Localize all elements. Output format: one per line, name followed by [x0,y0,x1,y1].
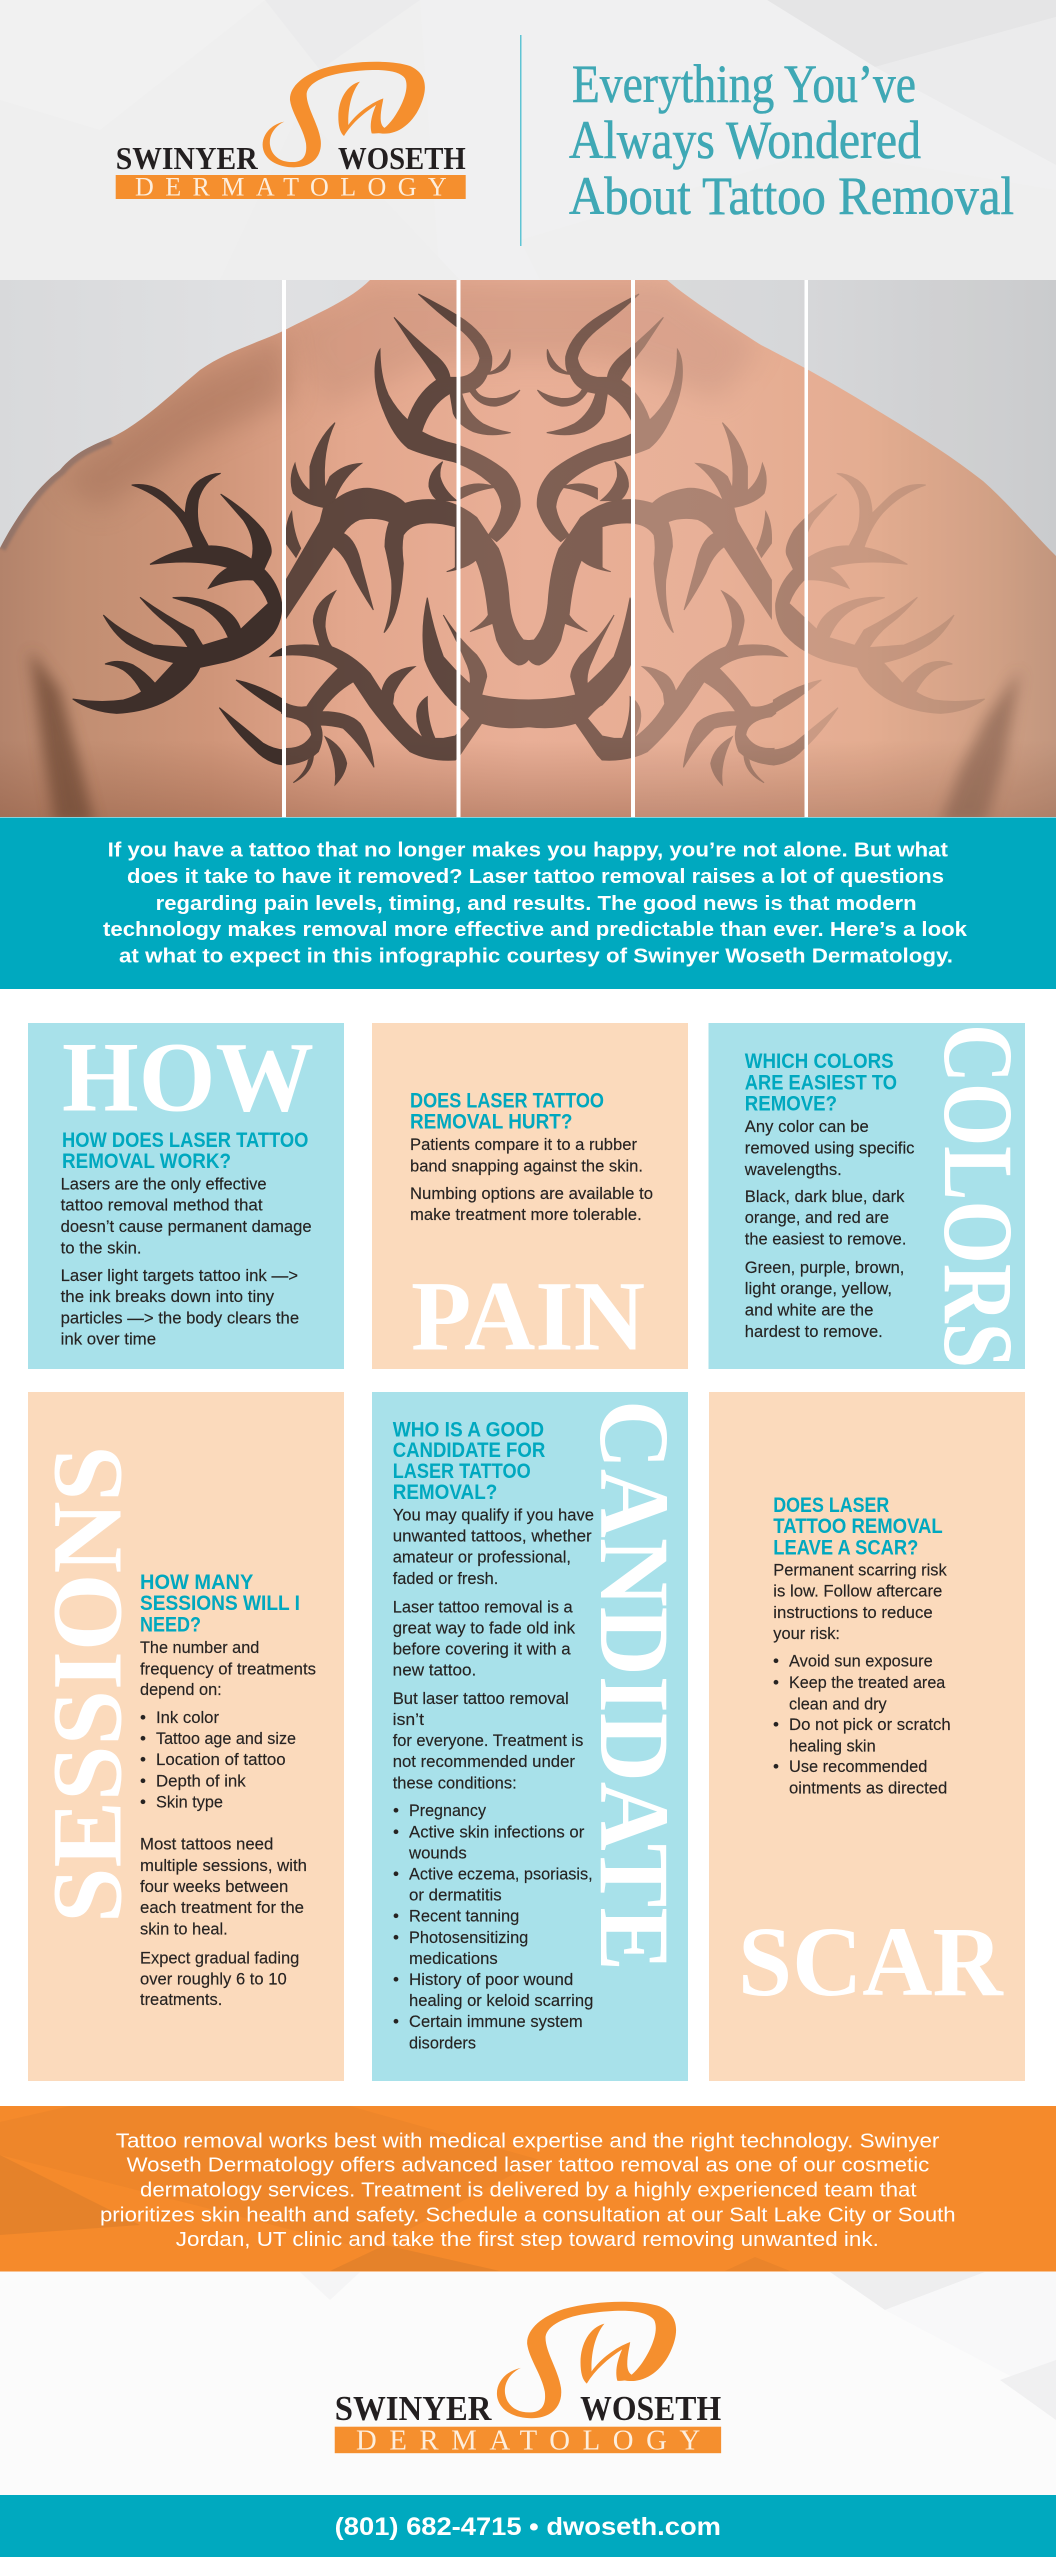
text: how [61,1174,312,1349]
text: candidate: Photosensitizing [409,1928,528,1947]
text: candidate: healing or keloid scarring [409,1991,593,2010]
panel: colors [708,1023,1034,1369]
title [569,54,1014,226]
text: sessions: • [140,1750,146,1769]
title: About Tattoo Removal [569,166,1014,226]
logo: footer: WOSETH [580,2389,721,2428]
text: candidate: • [393,1970,399,1989]
text: colors: Black, dark blue, dark [745,1187,905,1206]
text: scar: • [773,1652,779,1671]
text: candidate: Certain immune system [409,2012,583,2031]
panel: scar: SCAR [738,1906,1004,2017]
text: scar: • [773,1757,779,1776]
text: sessions: Location of tattoo [156,1750,286,1769]
text: colors: the easiest to remove. [745,1229,906,1248]
closing band: dermatology services. Treatment is delivered by a highly experienced team that [140,2180,917,2202]
heading: candidate: REMOVAL? [393,1481,497,1504]
footer contact band [0,2495,1056,2557]
text: scar: • [773,1673,779,1692]
text: scar: is low. Follow aftercare [773,1582,942,1600]
text: candidate: • [393,1907,399,1926]
logo: Swinyer Woseth Dermatology: SWINYER [116,140,259,176]
text: candidate: these conditions: [393,1774,517,1792]
text: colors [744,1117,915,1341]
text: scar: instructions to reduce [773,1603,933,1622]
heading: how: HOW DOES LASER TATTOO [62,1129,308,1152]
text: pain [410,1135,653,1224]
text: sessions: Ink color [156,1708,219,1727]
panel: colors: COLORS [923,1024,1034,1368]
text: sessions: • [140,1792,146,1812]
heading: pain [410,1090,604,1133]
text: sessions: • [140,1771,146,1790]
text: how: Laser light targets tattoo ink —> [61,1266,298,1285]
text: scar: Use recommended [789,1757,927,1776]
panel: candidate: CANDIDATE [579,1400,690,1971]
text: sessions: Tattoo age and size [156,1729,296,1748]
text: sessions: frequency of treatments [140,1659,316,1678]
text: candidate: disorders [409,2034,476,2052]
photo: tattoo fading across a back [0,280,1056,825]
text: scar: clean and dry [789,1694,887,1713]
text: how: tattoo removal method that [61,1196,263,1215]
text: sessions: over roughly 6 to 10 [140,1970,287,1989]
header background [0,0,1056,280]
text: colors: Any color can be [745,1117,869,1136]
text: scar: • [773,1715,779,1734]
text: scar: Do not pick or scratch [789,1715,951,1734]
intro band: If you have a tattoo that no longer makes you happy, you’re not alone. But what [108,839,948,861]
text: candidate: Recent tanning [409,1907,519,1926]
text: sessions: Most tattoos need [140,1835,273,1854]
text: scar: healing skin [789,1736,876,1755]
text: candidate: new tattoo. [393,1661,476,1680]
text: colors: removed using specific [745,1138,915,1158]
text: scar: Permanent scarring risk [773,1561,947,1580]
text: candidate: • [393,1822,399,1841]
text: sessions: multiple sessions, with [140,1856,307,1875]
footer contact band: (801) 682-4715 • dwoseth.com [335,2513,721,2541]
text: scar: your risk: [773,1624,840,1643]
text: colors: and white are the [745,1300,873,1320]
panel: how: HOW [62,1021,314,1132]
heading: scar [773,1494,943,1559]
text: sessions: Depth of ink [156,1771,246,1790]
text: colors: light orange, yellow, [745,1279,892,1298]
heading: scar: DOES LASER [773,1494,889,1517]
text: candidate: isn’t [393,1710,424,1729]
text: sessions: treatments. [140,1990,222,2009]
footer logo background [0,2272,1056,2496]
text: how: to the skin. [61,1238,142,1257]
text: colors: wavelengths. [744,1160,842,1179]
text: pain: Numbing options are available to [410,1184,653,1203]
text: how: the ink breaks down into tiny [61,1287,275,1306]
heading: scar: TATTOO REMOVAL [773,1515,943,1538]
text: candidate: • [393,1928,399,1947]
intro band: does it take to have it removed? Laser tattoo removal raises a lot of questions [127,866,944,888]
text: candidate: for everyone. Treatment is [393,1731,583,1750]
text: candidate: before covering it with a [393,1640,571,1658]
logo: footer: DERMATOLOGY [356,2425,700,2457]
heading: colors: REMOVE? [745,1092,837,1115]
white strip dividers [282,280,808,817]
text: colors: Green, purple, brown, [745,1258,904,1277]
text: how: doesn’t cause permanent damage [61,1217,312,1236]
text: scar: Avoid sun exposure [789,1652,933,1671]
shoulders and back [0,280,1056,825]
intro band: regarding pain levels, timing, and results. The good news is that modern [156,893,917,915]
intro band: technology makes removal more effective and predictable than ever. Here’s a look [103,919,968,941]
text: candidate: not recommended under [393,1752,575,1771]
text: candidate: But laser tattoo removal [393,1689,569,1708]
text: candidate: • [393,2012,399,2031]
text: sessions: • [140,1729,146,1748]
logo: Swinyer Woseth Dermatology: DERMATOLOGY [135,173,447,202]
text: scar: Keep the treated area [789,1673,946,1692]
tattoo strips [73,294,985,785]
text: candidate: Laser tattoo removal is a [393,1597,573,1616]
heading: candidate: LASER TATTOO [393,1460,531,1483]
title: Always Wondered [569,110,921,170]
closing band [0,2106,1056,2272]
heading: candidate [393,1419,545,1504]
text: sessions: four weeks between [140,1877,288,1896]
heading: sessions: NEED? [140,1613,201,1636]
logo: footer [335,2302,721,2457]
text: sessions: each treatment for the [140,1898,304,1917]
text: how: Lasers are the only effective [61,1174,267,1193]
text: sessions: The number and [140,1638,259,1657]
text: candidate: Active skin infections or [409,1822,585,1841]
text: candidate: medications [409,1949,498,1968]
text: sessions: skin to heal. [140,1919,228,1938]
heading: candidate: CANDIDATE FOR [393,1439,545,1462]
text: sessions [140,1638,316,2009]
heading: pain: DOES LASER TATTOO [410,1090,604,1113]
heading: sessions [140,1571,300,1636]
panel: candidate [372,1392,690,2081]
text: colors: hardest to remove. [745,1322,883,1341]
text: scar: ointments as directed [789,1778,947,1798]
intro band: at what to expect in this infographic courtesy of Swinyer Woseth Dermatology. [119,946,953,968]
text: candidate: • [393,1864,399,1884]
text: how: ink over time [61,1330,156,1349]
text: candidate: History of poor wound [409,1970,573,1989]
panel: sessions [28,1392,344,2081]
text: sessions: depend on: [140,1680,222,1699]
closing band: Woseth Dermatology offers advanced laser tattoo removal as one of our cosmetic [127,2155,929,2177]
text: candidate: or dermatitis [409,1885,502,1904]
header divider [520,35,522,246]
logo: footer: SWINYER [335,2389,492,2428]
text: candidate: You may qualify if you have [393,1505,594,1524]
text: candidate: faded or fresh. [393,1569,498,1588]
closing band: Jordan, UT clinic and take the first step toward removing unwanted ink. [176,2229,879,2251]
heading: how: REMOVAL WORK? [62,1150,231,1173]
text: sessions: • [140,1708,146,1727]
closing band: prioritizes skin health and safety. Schedule a consultation at our Salt Lake City or South [100,2205,956,2227]
text: sessions: Expect gradual fading [140,1948,299,1967]
text: candidate: great way to fade old ink [393,1619,575,1638]
text: how: particles —> the body clears the [61,1308,299,1327]
icon: SW monogram footer [497,2302,676,2418]
logo: Swinyer Woseth Dermatology [116,62,466,202]
panel: pain: PAIN [411,1260,645,1371]
text: candidate: Pregnancy [409,1801,486,1820]
text: candidate: • [393,1801,399,1820]
icon: SW monogram [263,62,425,167]
panel: how [28,1021,344,1369]
heading: candidate: WHO IS A GOOD [393,1419,544,1442]
heading: colors: ARE EASIEST TO [745,1071,897,1094]
title: Everything You’ve [572,54,916,114]
panel: scar [709,1392,1025,2081]
intro band [0,818,1056,989]
panel: sessions: SESSIONS [32,1446,143,1923]
text: pain: Patients compare it to a rubber [410,1135,637,1154]
text: scar [773,1561,951,1798]
heading: colors: WHICH COLORS [745,1050,894,1073]
text: candidate: Active eczema, psoriasis, [409,1864,593,1884]
text: candidate: wounds [408,1843,467,1862]
heading: sessions: HOW MANY [140,1571,253,1594]
text: candidate: unwanted tattoos, whether [393,1527,592,1546]
heading: pain: REMOVAL HURT? [410,1110,572,1133]
text: candidate: amateur or professional, [393,1548,571,1566]
heading: colors [745,1050,897,1115]
heading: sessions: SESSIONS WILL I [140,1592,300,1615]
text: sessions: Skin type [156,1792,223,1812]
text: pain: band snapping against the skin. [410,1156,643,1175]
text: colors: orange, and red are [745,1208,889,1227]
text: candidate [393,1505,594,2052]
logo: Swinyer Woseth Dermatology: WOSETH [338,140,466,176]
heading: scar: LEAVE A SCAR? [773,1536,918,1559]
text: pain: make treatment more tolerable. [410,1205,642,1224]
panel: pain [372,1023,688,1371]
closing band: Tattoo removal works best with medical expertise and the right technology. Swinyer [116,2130,940,2152]
heading: how [62,1129,308,1173]
